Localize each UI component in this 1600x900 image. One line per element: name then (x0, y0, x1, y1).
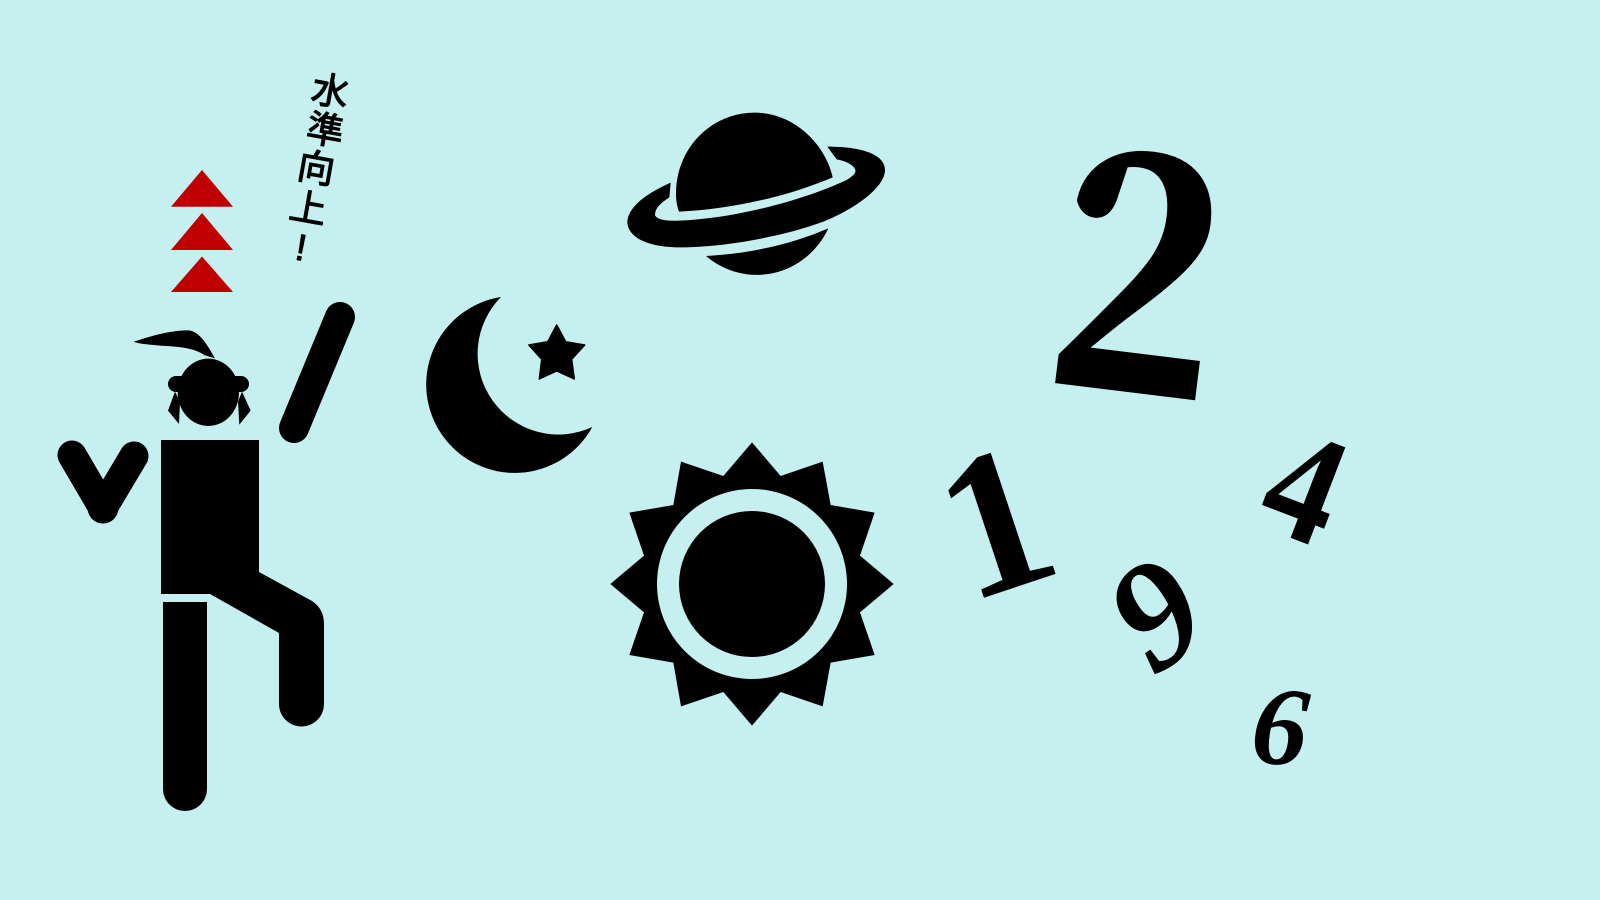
torso and raised leg (161, 440, 324, 726)
icon: crescent moon and star (426, 297, 592, 473)
numbers: 6 (1247, 663, 1314, 791)
slanted vertical text: 準 (303, 107, 347, 154)
numbers: 1 (911, 398, 1080, 646)
lowered arm bent in V (72, 455, 134, 524)
slanted vertical text: 向 (294, 145, 338, 192)
icon: saturn (627, 113, 885, 275)
head with hair (134, 330, 251, 426)
numbers (911, 25, 1370, 791)
icon: sun (610, 442, 894, 726)
slanted vertical text: 水 (308, 68, 352, 115)
icon: triangles pointing up (171, 170, 233, 292)
figure: person raising arms (72, 170, 340, 811)
slanted vertical text (286, 68, 352, 269)
numbers: 2 (1031, 25, 1250, 487)
raised arm (294, 317, 340, 428)
slanted vertical text: 上 (286, 185, 330, 232)
standing leg (163, 602, 207, 811)
slanted vertical text: ! (293, 227, 310, 269)
numbers: 4 (1240, 392, 1370, 581)
numbers: 9 (1076, 523, 1235, 704)
